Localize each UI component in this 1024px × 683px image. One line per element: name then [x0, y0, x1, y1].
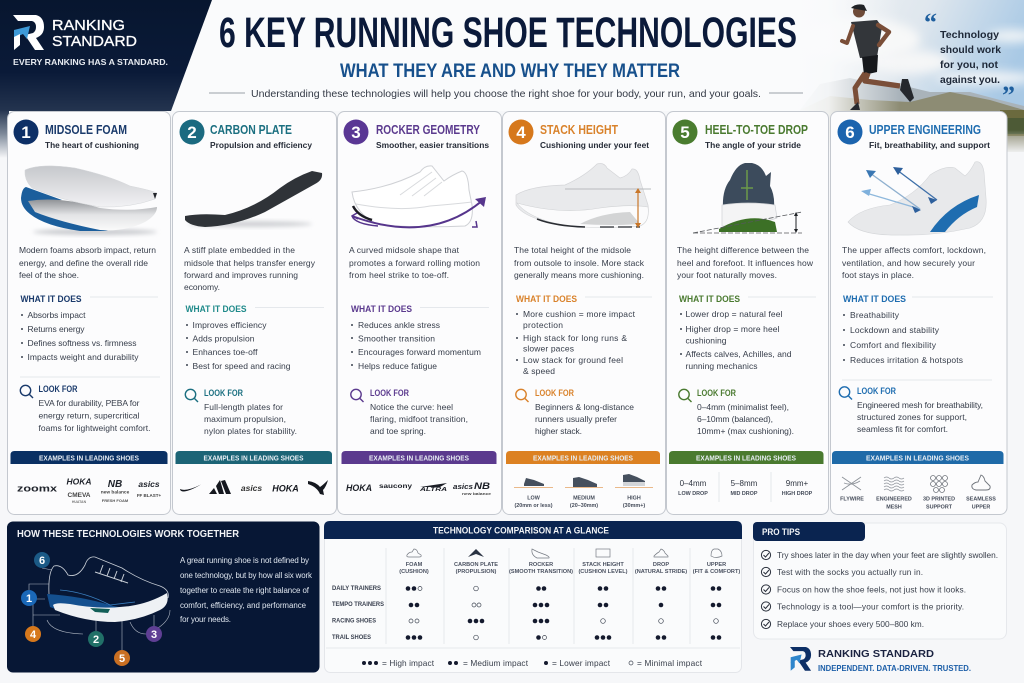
- hero photo: runner over mountains: [790, 0, 1024, 154]
- table heading bar: [324, 521, 742, 539]
- number badge 4: 4: [516, 123, 526, 142]
- description: foot stays in place.: [842, 270, 914, 280]
- number badge 1: 1: [21, 123, 31, 142]
- callout numbers: 3: [151, 629, 157, 641]
- what it does: Encourages forward momentum: [358, 347, 481, 357]
- quote: [924, 8, 1015, 110]
- tip list: [761, 550, 998, 629]
- brand tagline: EVERY RANKING HAS A STANDARD.: [13, 57, 168, 67]
- column headers: [399, 549, 740, 575]
- look for: 0–4mm (minimalist feel),: [697, 402, 789, 412]
- examples bar: EXAMPLES IN LEADING SHOES: [204, 454, 304, 462]
- what it does: Improves efficiency: [192, 320, 267, 330]
- description: generally means more cushioning.: [514, 270, 644, 280]
- quote: against you.: [940, 74, 1000, 86]
- column headers: (FIT & COMFORT): [693, 569, 740, 575]
- column headers: STACK HEIGHT: [582, 562, 624, 568]
- title: 6 KEY RUNNING SHOE TECHNOLOGIES: [219, 9, 797, 57]
- what it does: [516, 294, 652, 376]
- legend: = High impact: [382, 658, 435, 668]
- panel: pro tips: [753, 522, 1006, 639]
- examples bar: [506, 451, 660, 464]
- examples bar: [10, 451, 168, 464]
- look for: 6–10mm (balanced),: [697, 414, 773, 424]
- look for: EVA for durability, PEBA for: [38, 398, 140, 408]
- what it does: & speed: [523, 366, 555, 376]
- heading: UPPER ENGINEERING: [869, 123, 981, 137]
- examples bar: [669, 451, 824, 464]
- brand logos: zoomx: [17, 484, 58, 494]
- brand logos: ALTRA: [419, 487, 447, 493]
- row labels: [332, 585, 384, 641]
- look for: seamless fit for comfort.: [857, 424, 948, 434]
- number badge 3: 3: [351, 123, 361, 142]
- look for: structured zones for support,: [857, 412, 967, 422]
- panel paragraph: comfort, efficiency, and performance: [180, 601, 307, 610]
- column headers: CARBON PLATE: [454, 562, 498, 568]
- what it does: Enhances toe-off: [192, 347, 258, 357]
- what it does: cushioning: [686, 336, 727, 346]
- what it does: [679, 294, 816, 371]
- brand logos: saucony: [379, 483, 412, 490]
- look for: foams for lightweight comfort.: [38, 423, 150, 433]
- column headers: (PROPULSION): [456, 569, 496, 575]
- description: The total height of the midsole: [514, 245, 631, 255]
- legend: [362, 658, 703, 668]
- what it does: Lower drop = natural feel: [686, 309, 783, 319]
- column headers: (NATURAL STRIDE): [635, 569, 687, 575]
- quote: ”: [1002, 81, 1015, 110]
- what it does: WHAT IT DOES: [679, 294, 740, 305]
- what it does: Comfort and flexibility: [850, 340, 937, 350]
- what it does: Lockdown and stability: [850, 325, 940, 335]
- tip list: Try shoes later in the day when your feet are slightly swollen.: [777, 550, 998, 560]
- examples bar: [176, 451, 332, 464]
- brand logos: new balance: [101, 490, 130, 496]
- brand logos: NB: [108, 479, 122, 490]
- look for: energy return, supercritical: [38, 410, 140, 420]
- tagline: Smoother, easier transitions: [376, 140, 489, 150]
- examples bar: EXAMPLES IN LEADING SHOES: [866, 454, 969, 462]
- what it does: Helps reduce fatigue: [358, 361, 437, 371]
- brand logos: CMEVA: [68, 492, 91, 499]
- upper technologies: MESH: [886, 504, 902, 510]
- drop ranges: 9mm+: [786, 479, 809, 488]
- description: [514, 245, 645, 280]
- panel: how these technologies work together: [7, 522, 320, 672]
- stack height examples: MEDIUM: [573, 496, 595, 502]
- examples bar: [342, 451, 496, 464]
- number badge 2: [180, 120, 204, 144]
- column headers: (CUSHION LEVEL): [578, 569, 628, 575]
- illustration: engineered upper: [848, 162, 986, 235]
- quote: for you, not: [940, 59, 998, 71]
- tip list: Focus on how the shoe feels, not just how it looks.: [777, 584, 966, 594]
- what it does: WHAT IT DOES: [843, 294, 906, 305]
- brand logos: FRESH FOAM: [102, 498, 129, 503]
- illustration: foam midsole: [21, 166, 157, 235]
- description: [842, 245, 986, 280]
- column grid: [326, 548, 740, 648]
- description: midsole that helps transfer energy: [184, 258, 316, 268]
- legend: = Minimal impact: [637, 658, 703, 668]
- brand logos: asics: [453, 484, 473, 491]
- callout numbers: 2: [93, 634, 99, 646]
- heading: STACK HEIGHT: [540, 123, 618, 137]
- what it does: Higher drop = more heel: [686, 324, 780, 334]
- upper technologies: SEAMLESS: [966, 496, 996, 502]
- callout numbers: 5: [119, 653, 125, 665]
- look for: [351, 388, 468, 436]
- what it does: Affects calves, Achilles, and: [686, 349, 792, 359]
- what it does: Low stack for ground feel: [523, 355, 623, 365]
- tagline: The heart of cushioning: [45, 140, 139, 150]
- pro tips tab: PRO TIPS: [762, 527, 800, 538]
- description: [19, 245, 156, 280]
- brand logos: new balance: [462, 491, 492, 496]
- brand logos: HUATAN: [72, 500, 87, 504]
- what it does: [186, 304, 324, 371]
- description: feel of the shoe.: [19, 270, 79, 280]
- description: [349, 245, 480, 280]
- what it does: Impacts weight and durability: [28, 352, 139, 362]
- what it does: WHAT IT DOES: [20, 294, 82, 305]
- what it does: protection: [523, 320, 563, 330]
- examples bar: EXAMPLES IN LEADING SHOES: [369, 454, 469, 462]
- brand logos: [17, 476, 162, 504]
- look for: maximum propulsion,: [204, 414, 286, 424]
- look for: Engineered mesh for breathability,: [857, 400, 983, 410]
- panel paragraph: one technology, but by how all six work: [180, 571, 312, 580]
- look for: Full-length plates for: [204, 402, 283, 412]
- drop ranges: 5–8mm: [731, 479, 758, 488]
- illustration: stack height shoe: [516, 164, 651, 228]
- look for: [679, 388, 794, 436]
- tagline: Propulsion and efficiency: [210, 140, 312, 150]
- what it does: Reduces ankle stress: [358, 320, 440, 330]
- look for: 10mm+ (max cushioning).: [697, 426, 794, 436]
- drop ranges: 0–4mm: [680, 479, 707, 488]
- description: from outsole to insole. More stack: [514, 258, 645, 268]
- what it does: slower paces: [523, 344, 574, 354]
- legend: = Medium impact: [463, 658, 529, 668]
- description: The height difference between the: [677, 245, 809, 255]
- footer logo mark: [790, 647, 811, 671]
- what it does: Returns energy: [28, 324, 85, 334]
- look for: LOOK FOR: [38, 384, 78, 395]
- look for: higher stack.: [535, 426, 582, 436]
- brand logos: NB: [474, 481, 490, 492]
- description: A stiff plate embedded in the: [184, 245, 295, 255]
- number badge 5: 5: [680, 123, 690, 142]
- panel heading: HOW THESE TECHNOLOGIES WORK TOGETHER: [17, 528, 239, 540]
- panel: heel-to-toe drop: [666, 112, 828, 514]
- examples bar: EXAMPLES IN LEADING SHOES: [39, 454, 139, 462]
- panel paragraph: together to create the right balance of: [180, 586, 310, 595]
- panel: carbon plate: [172, 112, 336, 514]
- stack height examples: HIGH: [627, 496, 641, 502]
- row labels: TRAIL SHOES: [332, 634, 371, 641]
- look for: LOOK FOR: [535, 388, 574, 399]
- illustration: rocker shoe: [352, 166, 486, 227]
- quote: Technology: [940, 29, 999, 41]
- stack height examples: [514, 474, 653, 509]
- drop ranges: [678, 472, 813, 502]
- brand logos: HOKA: [272, 484, 299, 494]
- upper technologies: UPPER: [972, 504, 990, 510]
- what it does: Adds propulsion: [192, 334, 255, 344]
- description: heel and forefoot. It influences how: [677, 258, 814, 268]
- look for: runners usually prefer: [535, 414, 617, 424]
- what it does: Best for speed and racing: [192, 361, 291, 371]
- description: promotes a forward rolling motion: [349, 258, 480, 268]
- panel: stack height: [502, 112, 666, 514]
- what it does: Absorbs impact: [28, 310, 86, 320]
- panel paragraph: for your needs.: [180, 615, 231, 624]
- brand logos: HOKA: [346, 483, 372, 493]
- brand logos: asics: [138, 479, 160, 489]
- tagline: Cushioning under your feet: [540, 140, 649, 150]
- description: Modern foams absorb impact, return: [19, 245, 156, 255]
- tip list: Technology is a tool—your comfort is the priority.: [777, 602, 964, 612]
- look for: LOOK FOR: [370, 388, 409, 399]
- illustration: drop diagram: [693, 163, 802, 233]
- tip list: Test with the socks you actually run in.: [777, 567, 923, 577]
- panel: technology comparison: [324, 521, 742, 672]
- callout numbers: [21, 552, 162, 666]
- upper technologies: ENGINEERED: [876, 496, 912, 502]
- what it does: [20, 294, 160, 377]
- tagline: The angle of your stride: [705, 140, 801, 150]
- description: A curved midsole shape that: [349, 245, 460, 255]
- quote: “: [924, 8, 937, 37]
- look for: [185, 388, 297, 436]
- row labels: RACING SHOES: [332, 618, 376, 624]
- tip list: Replace your shoes every 500–800 km.: [777, 619, 924, 629]
- footer name: RANKING STANDARD: [818, 648, 934, 660]
- look for: Notice the curve: heel: [370, 402, 453, 412]
- column headers: ROCKER: [529, 562, 553, 568]
- drop ranges: HIGH DROP: [782, 491, 813, 497]
- what it does: Breathability: [850, 310, 900, 320]
- column headers: (CUSHION): [399, 569, 429, 575]
- column headers: DROP: [653, 562, 669, 568]
- what it does: WHAT IT DOES: [186, 304, 246, 315]
- examples bar: [832, 451, 1004, 464]
- number badge 3: [344, 120, 368, 144]
- panel: rocker geometry: [338, 112, 502, 514]
- callout numbers: 4: [30, 629, 37, 641]
- heading: CARBON PLATE: [210, 123, 292, 137]
- description: your foot naturally moves.: [677, 270, 777, 280]
- drop ranges: MID DROP: [731, 491, 758, 497]
- drop ranges: LOW DROP: [678, 491, 708, 497]
- number badge 6: 6: [845, 123, 855, 142]
- look for: LOOK FOR: [204, 388, 243, 399]
- examples bar: EXAMPLES IN LEADING SHOES: [696, 454, 796, 462]
- annotated shoe diagram: [29, 557, 170, 650]
- look for: [516, 388, 634, 436]
- column headers: UPPER: [707, 562, 726, 568]
- column headers: FOAM: [406, 562, 423, 568]
- description: [184, 245, 316, 292]
- description: ventilation, and how securely your: [842, 258, 975, 268]
- upper technologies: SUPPORT: [926, 504, 953, 510]
- stack height examples: (20mm or less): [514, 503, 553, 509]
- description: [677, 245, 814, 280]
- stack height examples: LOW: [527, 496, 541, 502]
- description: The upper affects comfort, lockdown,: [842, 245, 986, 255]
- number badge 2: 2: [187, 123, 197, 142]
- brand logos: [180, 480, 328, 495]
- description: forward and improves running: [184, 270, 298, 280]
- brand name: RANKING: [52, 17, 125, 34]
- intro line: Understanding these technologies will help you choose the right shoe for your body, your run, and your goals.: [251, 88, 761, 100]
- what it does: running mechanics: [686, 361, 758, 371]
- look for: Beginners & long-distance: [535, 402, 634, 412]
- upper technologies: [840, 475, 996, 510]
- what it does: Smoother transition: [358, 334, 435, 344]
- what it does: Reduces irritation & hotspots: [850, 355, 963, 365]
- description: energy, and define the overall ride: [19, 258, 148, 268]
- panel: upper engineering: [830, 112, 1007, 514]
- upper technologies: 3D PRINTED: [923, 496, 955, 502]
- footer brand: [790, 647, 971, 673]
- description: from heel strike to toe-off.: [349, 270, 449, 280]
- look for: and toe spring.: [370, 426, 426, 436]
- what it does: WHAT IT DOES: [351, 304, 412, 315]
- header white band: [150, 0, 850, 111]
- stack height examples: (30mm+): [623, 503, 645, 509]
- column headers: (SMOOTH TRANSITION): [509, 569, 573, 575]
- subtitle: WHAT THEY ARE AND WHY THEY MATTER: [340, 61, 680, 82]
- pro tips tab: [753, 522, 865, 541]
- runner: [842, 4, 914, 110]
- brand logos: [346, 481, 492, 496]
- examples bar: EXAMPLES IN LEADING SHOES: [533, 454, 633, 462]
- heading: ROCKER GEOMETRY: [376, 123, 481, 137]
- heading: MIDSOLE FOAM: [45, 123, 127, 137]
- row labels: DAILY TRAINERS: [332, 585, 381, 592]
- description: economy.: [184, 282, 220, 292]
- impact dots: [406, 586, 721, 640]
- legend: = Lower impact: [552, 658, 611, 668]
- number badge 1: [14, 120, 38, 144]
- table heading bar: TECHNOLOGY COMPARISON AT A GLANCE: [433, 526, 609, 536]
- navy brand panel: [0, 0, 212, 158]
- look for: [839, 386, 983, 434]
- brand name: [52, 17, 137, 50]
- footer tagline: INDEPENDENT. DATA-DRIVEN. TRUSTED.: [818, 663, 971, 673]
- look for: LOOK FOR: [857, 386, 896, 397]
- brand logo mark: [13, 15, 44, 50]
- row labels: TEMPO TRAINERS: [332, 601, 384, 608]
- brand logos: FF BLAST+: [137, 493, 162, 498]
- what it does: Defines softness vs. firmness: [28, 338, 136, 348]
- panel paragraph: [180, 556, 312, 624]
- illustration: carbon plate: [185, 171, 322, 227]
- number badge 5: [672, 120, 698, 144]
- what it does: WHAT IT DOES: [516, 294, 577, 305]
- what it does: [351, 304, 489, 371]
- number badge 6: [838, 120, 862, 144]
- brand logos: HOKA: [66, 476, 92, 486]
- heading: HEEL-TO-TOE DROP: [705, 123, 808, 137]
- number badge 4: [508, 120, 534, 144]
- callout numbers: 1: [26, 593, 32, 605]
- look for: nylon plates for stability.: [204, 426, 297, 436]
- what it does: More cushion = more impact: [523, 309, 636, 319]
- brand logos: asics: [241, 483, 262, 493]
- upper technologies: FLYWIRE: [840, 496, 864, 502]
- look for: LOOK FOR: [697, 388, 736, 399]
- stack height examples: (20–30mm): [570, 503, 598, 509]
- quote: should work: [940, 44, 1001, 56]
- brand name: STANDARD: [52, 33, 137, 50]
- callout numbers: 6: [39, 555, 45, 567]
- panel: midsole foam: [8, 112, 170, 514]
- what it does: High stack for long runs &: [523, 333, 627, 343]
- tagline: Fit, breathability, and support: [869, 140, 990, 150]
- panel paragraph: A great running shoe is not defined by: [180, 556, 309, 565]
- what it does: [842, 294, 993, 380]
- look for: flaring, midfoot transition,: [370, 414, 468, 424]
- look for: [20, 384, 150, 433]
